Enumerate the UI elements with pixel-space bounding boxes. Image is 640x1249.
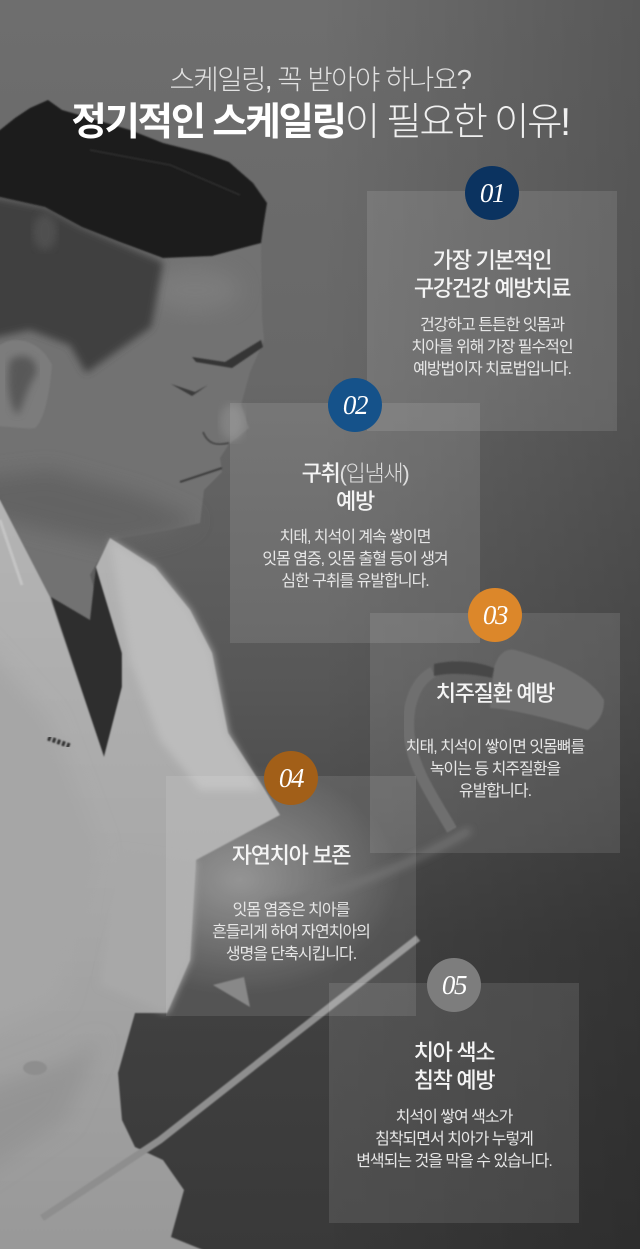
text 03: 유발합니다. — [459, 783, 531, 800]
text 04: 생명을 단축시킵니다. — [226, 946, 356, 963]
text 05: 치석이 쌓여 색소가 — [396, 1109, 512, 1126]
badge 05: 05 — [442, 970, 466, 1000]
badge 04: 04 — [279, 763, 303, 793]
scrub top — [51, 567, 122, 757]
neck and face — [0, 170, 264, 640]
text 01 — [411, 316, 573, 378]
doctor — [0, 100, 418, 1249]
heading 04: 자연치아 보존 — [232, 843, 350, 868]
heading 01: 구강건강 예방치료 — [414, 276, 570, 301]
text 02: 잇몸 염증, 잇몸 출혈 등이 생겨 — [262, 551, 448, 568]
heading 02: 구취(입냄새) — [302, 461, 408, 486]
text 01: 예방법이자 치료법입니다. — [413, 361, 571, 378]
side of head, faded hair — [0, 190, 163, 373]
heading 05: 침착 예방 — [414, 1068, 494, 1093]
heading 02: 예방 — [336, 489, 374, 514]
badge 02: 02 — [343, 390, 367, 420]
eyebrow and eye — [192, 340, 263, 368]
text 03 — [406, 738, 584, 800]
tube — [42, 938, 418, 1218]
text 04: 흔들리게 하여 자연치아의 — [212, 924, 370, 941]
panel 04 — [166, 776, 416, 1016]
text 02 — [262, 528, 448, 590]
badge 03 — [468, 588, 522, 642]
text 01: 치아를 위해 가장 필수적인 — [411, 339, 573, 356]
text 04 — [212, 902, 370, 963]
heading 02 — [302, 461, 408, 514]
text 05: 침착되면서 치아가 누렇게 — [375, 1131, 533, 1148]
heading 05 — [414, 1040, 495, 1093]
title — [71, 64, 569, 144]
panel 05 — [329, 983, 579, 1223]
text 04: 잇몸 염증은 치아를 — [233, 902, 349, 919]
text 02: 심한 구취를 유발합니다. — [281, 573, 429, 590]
text 01: 건강하고 튼튼한 잇몸과 — [420, 317, 564, 334]
text 05 — [356, 1108, 552, 1170]
heading 01: 가장 기본적인 — [433, 248, 551, 273]
title line 1: 스케일링, 꼭 받아야 하나요? — [170, 64, 470, 95]
lamp behind panel 03 — [265, 650, 604, 905]
cuff shadow fold — [213, 977, 250, 1007]
text 05: 변색되는 것을 막을 수 있습니다. — [356, 1153, 552, 1170]
badge 02 — [328, 378, 382, 432]
panel 02 — [230, 403, 480, 643]
heading 01 — [414, 248, 570, 301]
badge 04 — [264, 751, 318, 805]
ear — [0, 340, 52, 428]
text 03: 치태, 치석이 쌓이면 잇몸뼈를 — [406, 739, 584, 756]
heading 05: 치아 색소 — [414, 1040, 494, 1065]
heading 03: 치주질환 예방 — [436, 681, 554, 706]
badge 05 — [427, 958, 481, 1012]
hair — [0, 100, 267, 258]
text 02: 치태, 치석이 계속 쌓이면 — [280, 529, 430, 546]
badge 01: 01 — [480, 178, 504, 208]
text 03: 녹이는 등 치주질환을 — [430, 761, 560, 778]
badge 01 — [465, 166, 519, 220]
badge 03: 03 — [483, 600, 507, 630]
panel 01 — [367, 191, 617, 431]
white coat — [0, 480, 280, 1249]
panel 03 — [370, 613, 620, 853]
title line 2: 정기적인 스케일링이 필요한 이유! — [71, 101, 569, 144]
